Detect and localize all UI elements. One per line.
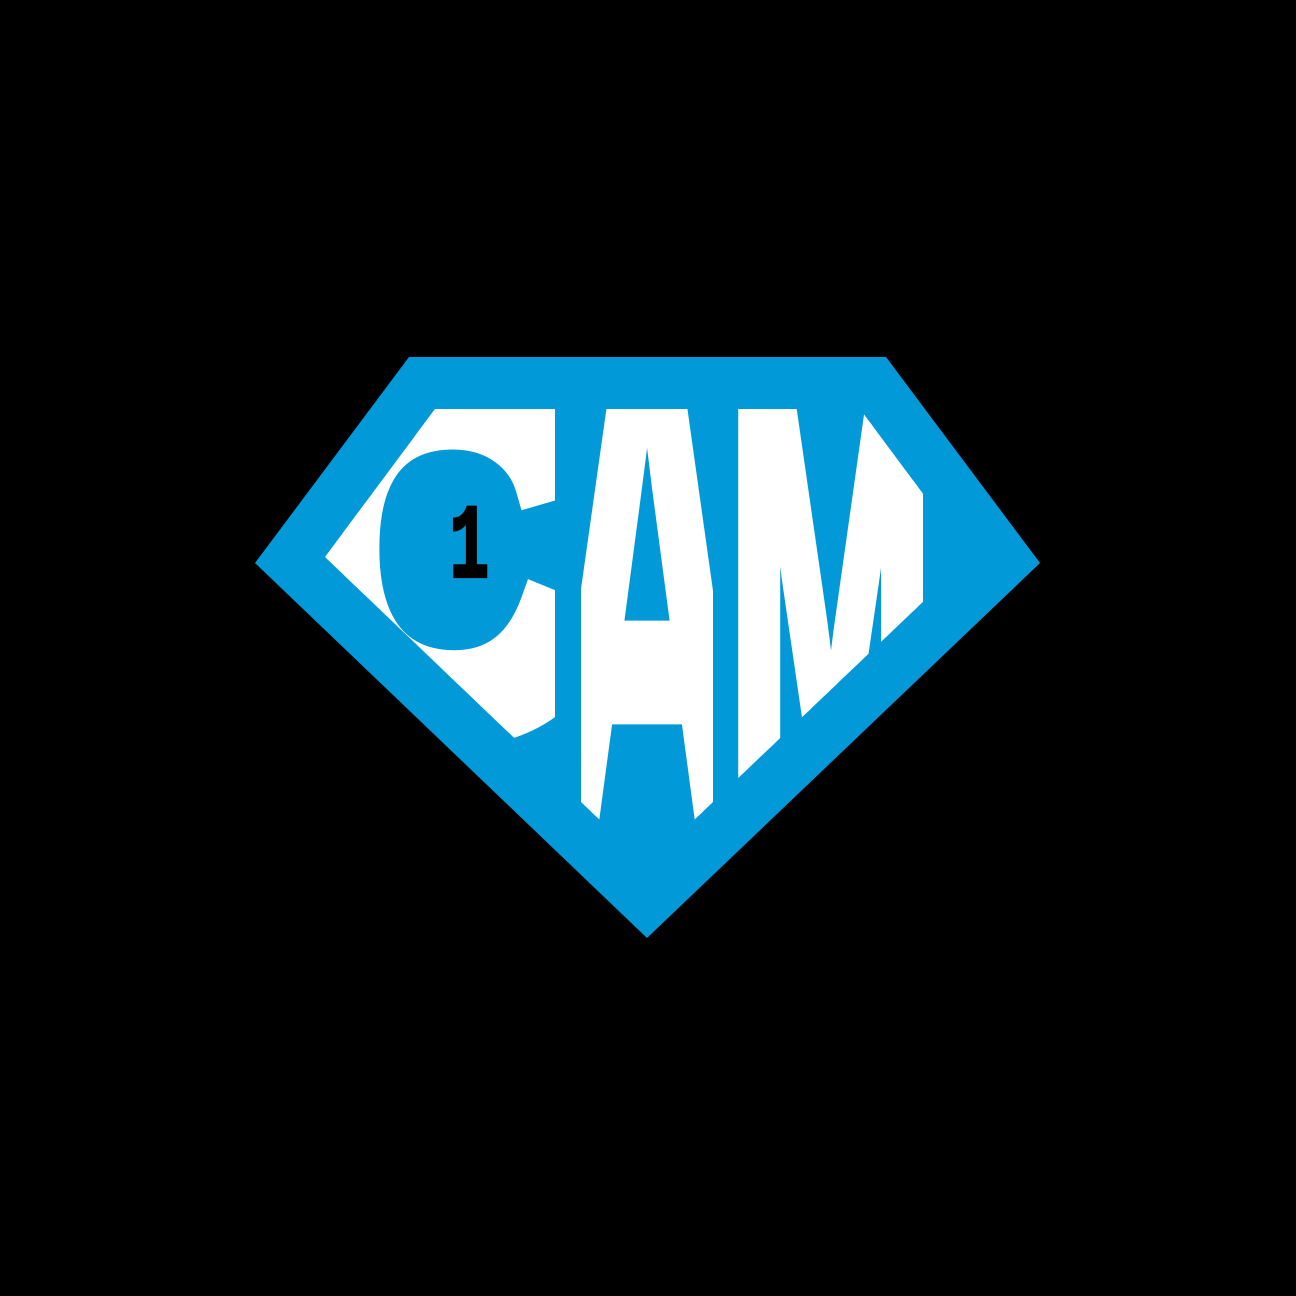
icon: blue diamond shield <box>255 357 1040 938</box>
logo wordmark: CAM <box>325 409 924 820</box>
letter C: C <box>274 270 610 829</box>
letter A: A <box>542 167 752 1005</box>
logo canvas <box>255 357 1040 938</box>
letter M: M <box>726 290 935 909</box>
numeral 1: 1 <box>450 490 489 609</box>
